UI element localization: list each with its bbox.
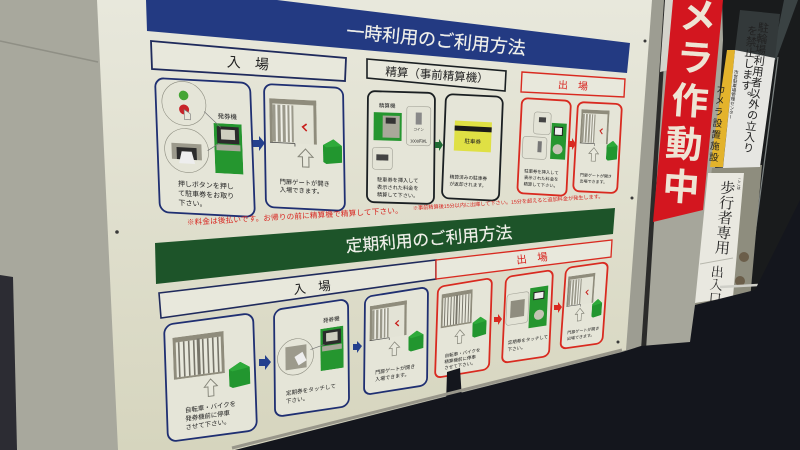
arrow [353, 341, 362, 353]
red banner: camera in operation: 作 [670, 80, 710, 123]
card: exit payment: 駐車券を挿入して [524, 167, 559, 176]
card: stop at machine [164, 313, 257, 442]
card: touch pass [274, 299, 349, 417]
white notice: pedestrian entrance: ここは [736, 177, 743, 191]
card: stop at machine: 発券機前に停車 [185, 408, 231, 423]
sign board [97, 0, 652, 450]
arrow [435, 139, 443, 151]
card: exit payment: 精算して下さい。 [524, 180, 558, 189]
touch circle [277, 336, 314, 378]
card: touch pass: 発券機 [323, 314, 340, 325]
card: insert ticket: 精算して下さい。 [377, 190, 418, 200]
heading box: entry: 入 場 [226, 54, 270, 72]
white notice: pedestrian entrance: 出入口 [706, 264, 725, 305]
card: press button [155, 78, 255, 217]
cast shadow [235, 200, 800, 450]
card: touch pass: 定期券をタッチして [286, 382, 336, 397]
card: exit gate: 出場できます。 [579, 177, 607, 185]
heading box: pass entry: 入 場 [293, 279, 332, 297]
card: pass gate opens: 門扉ゲートが開き [375, 363, 415, 376]
card: exit touch [502, 270, 553, 363]
card: exit gate [573, 102, 622, 193]
card: stop at machine: させて下さい。 [185, 418, 230, 432]
coin box [406, 106, 431, 146]
card: stop at machine: 自転車・バイクを [185, 399, 236, 415]
white notice: pedestrian entrance [695, 173, 744, 305]
board lower edge [232, 350, 622, 448]
panel frame [622, 0, 664, 352]
card: press button: 押しボタンを押し [178, 179, 234, 191]
yellow sign strip [706, 50, 735, 167]
ticket machine [214, 123, 243, 175]
card: gate opens: 入場できます。 [280, 185, 323, 196]
card: ticket returned: 精算済みの駐車券 [450, 173, 488, 182]
heading box: pass entry [159, 260, 436, 318]
ticket circle [164, 127, 209, 174]
card: press button: 下さい。 [178, 199, 207, 208]
dark door gap [641, 0, 672, 350]
silver post edge [753, 57, 778, 250]
card: insert ticket: 精算機 [379, 101, 396, 110]
ticket slot [372, 147, 392, 170]
heading box: exit: 出 場 [558, 78, 588, 93]
yellow sign strip: カメラ設置施設 [706, 83, 726, 163]
red banner: camera in operation: 中 [661, 166, 701, 209]
card: gate opens [264, 84, 345, 211]
card: exit gate opens [560, 262, 608, 349]
card: exit gate: 門扉ゲートが開き [580, 171, 612, 179]
heading box: exit [521, 72, 625, 97]
arrow [554, 302, 562, 313]
title: season pass use: 定期利用のご利用方法 [345, 223, 513, 256]
yellow parking ticket: 駐車券 [464, 137, 482, 146]
pale strip beside banner [660, 0, 674, 72]
white notice: no entry: を禁止します。 [738, 24, 758, 102]
arrow [494, 314, 502, 325]
card: exit touch: 下さい。 [507, 344, 526, 353]
card: gate opens: 門扉ゲートが開き [279, 177, 330, 188]
payment machine [374, 112, 402, 141]
card: exit payment: 表示された料金を [524, 174, 559, 183]
gray notice backing [735, 10, 780, 58]
shadow on left wall [0, 275, 17, 450]
heading box: pass exit [436, 240, 612, 279]
card: exit payment [517, 98, 571, 196]
green title band [155, 208, 615, 284]
steel post [772, 0, 798, 60]
arrow [568, 138, 576, 150]
card: exit stop: させて下さい。 [444, 359, 476, 371]
card: exit touch: 定期券をタッチして [508, 333, 548, 346]
heading box: payment: 精算（事前精算機） [385, 64, 489, 86]
card: exit stop [435, 278, 492, 378]
grey wall behind notices [695, 165, 762, 305]
card: press button: て駐車券をお取り [178, 189, 234, 200]
card: exit stop: 精算機前に停車 [444, 353, 476, 365]
wall seam [0, 41, 98, 62]
post shadow [446, 368, 462, 404]
card: ticket returned [442, 94, 503, 201]
card: exit gate opens: 門扉ゲートが開き [567, 325, 600, 335]
white notice: no entry: 市営駐車場管理センター [728, 69, 740, 119]
white notice: pedestrian entrance: 歩行者専用 [712, 179, 735, 257]
heading box: payment [367, 59, 506, 91]
button circle [161, 80, 207, 127]
red banner: camera in operation [653, 0, 723, 222]
door panel [646, 0, 727, 350]
card: touch pass: 下さい。 [286, 395, 308, 405]
white notice: no entry [723, 20, 775, 168]
door latch [720, 252, 758, 287]
card: pass gate opens [364, 287, 428, 395]
arrow [253, 136, 265, 151]
screws [115, 40, 646, 344]
card: insert ticket: 駐車券を挿入して [377, 175, 419, 185]
title: temporary use: 一時利用のご利用方法 [345, 21, 527, 59]
red note: pay later: ※料金は後払いです。お帰りの前に精算機で精算して下さい。 [187, 205, 403, 227]
white notice: no entry: 駐輪場利用者以外の立入り [741, 20, 770, 154]
arrow [259, 355, 271, 370]
dark upper area [690, 0, 800, 450]
red note: exit within 15 minutes: ※事前精算後15分以内に出庫して下さい。15分を超えると追加料金が発生します。 [413, 192, 604, 212]
card: pass gate opens: 入場できます。 [375, 371, 410, 383]
red banner: camera in operation: 動 [664, 123, 704, 166]
red banner: camera in operation: ラ [675, 37, 715, 80]
heading box: pass exit: 出 場 [516, 250, 549, 267]
card: ticket returned: が返却されます。 [449, 180, 487, 189]
card: press button: 発券機 [218, 111, 238, 121]
blue title band [146, 0, 630, 73]
heading box: entry [151, 41, 346, 81]
coin box: コイン [413, 127, 424, 132]
card: exit gate opens: 出場できます。 [567, 331, 595, 341]
card: insert ticket: 表示された料金を [377, 183, 419, 192]
coin box: 1000円札 [410, 137, 427, 144]
card: exit stop: 自転車・バイクを [445, 347, 481, 359]
card: insert ticket [367, 91, 435, 204]
